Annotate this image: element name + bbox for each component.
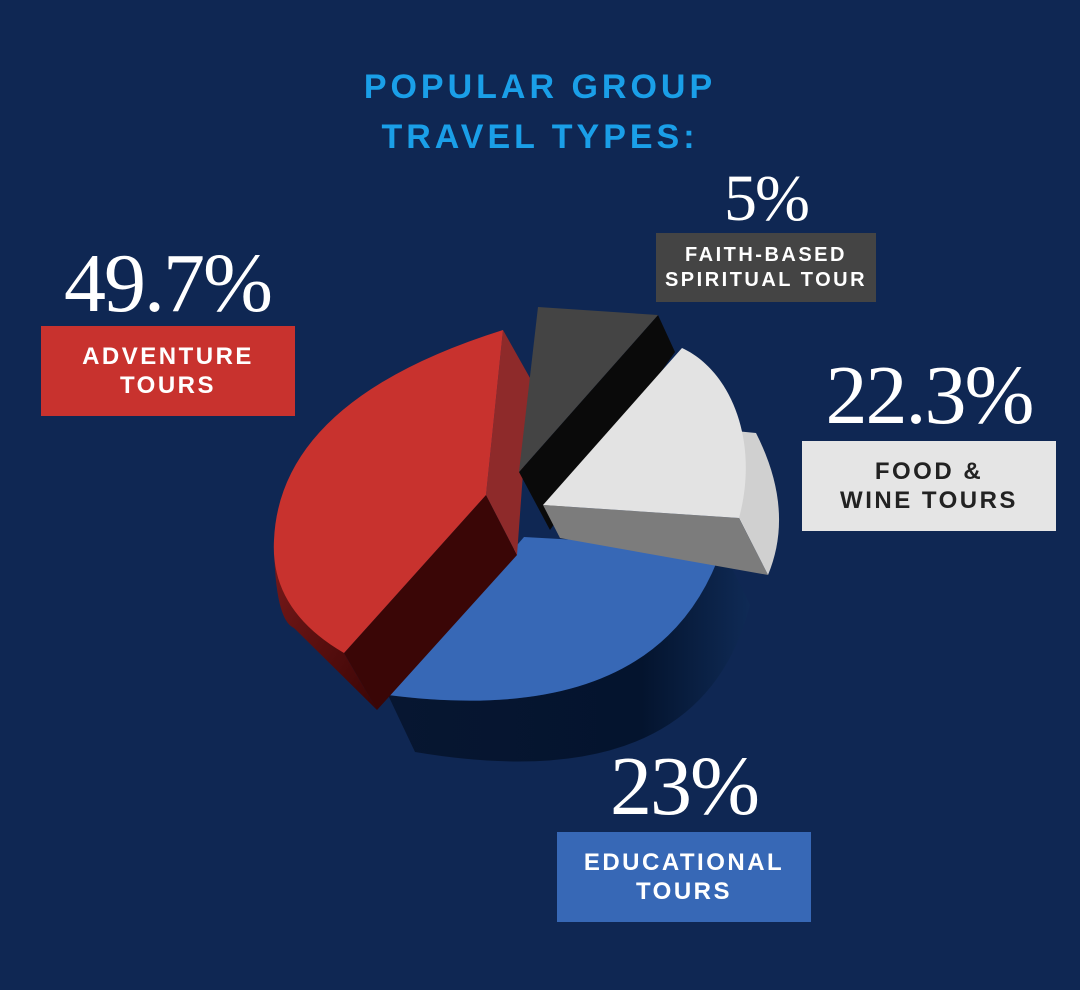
slice: adventure — [274, 330, 530, 710]
label: educational: TOURS — [636, 878, 732, 905]
slice: faith-based — [519, 307, 675, 530]
value: faith-based: 5% — [724, 162, 808, 235]
title: TRAVEL TYPES: — [381, 118, 699, 156]
label: adventure: ADVENTURE — [82, 343, 254, 370]
value: food & wine: 22.3% — [826, 349, 1032, 442]
label: faith-based: FAITH-BASED — [685, 244, 847, 266]
slice: educational top — [388, 537, 722, 701]
value: educational: 23% — [610, 740, 758, 833]
label: educational — [557, 832, 811, 922]
label: adventure — [41, 326, 295, 416]
label: educational: EDUCATIONAL — [584, 849, 784, 876]
title: POPULAR GROUP — [364, 68, 716, 106]
label: faith-based: SPIRITUAL TOUR — [665, 268, 867, 290]
slice: food & wine — [543, 348, 779, 575]
title — [364, 68, 716, 156]
label: food & wine — [802, 441, 1056, 531]
value: adventure: 49.7% — [64, 237, 271, 330]
slice: educational side — [388, 548, 750, 761]
label: food & wine: FOOD & — [875, 458, 983, 485]
label: food & wine: WINE TOURS — [840, 487, 1018, 514]
label: faith-based — [656, 233, 876, 302]
label: adventure: TOURS — [120, 372, 216, 399]
